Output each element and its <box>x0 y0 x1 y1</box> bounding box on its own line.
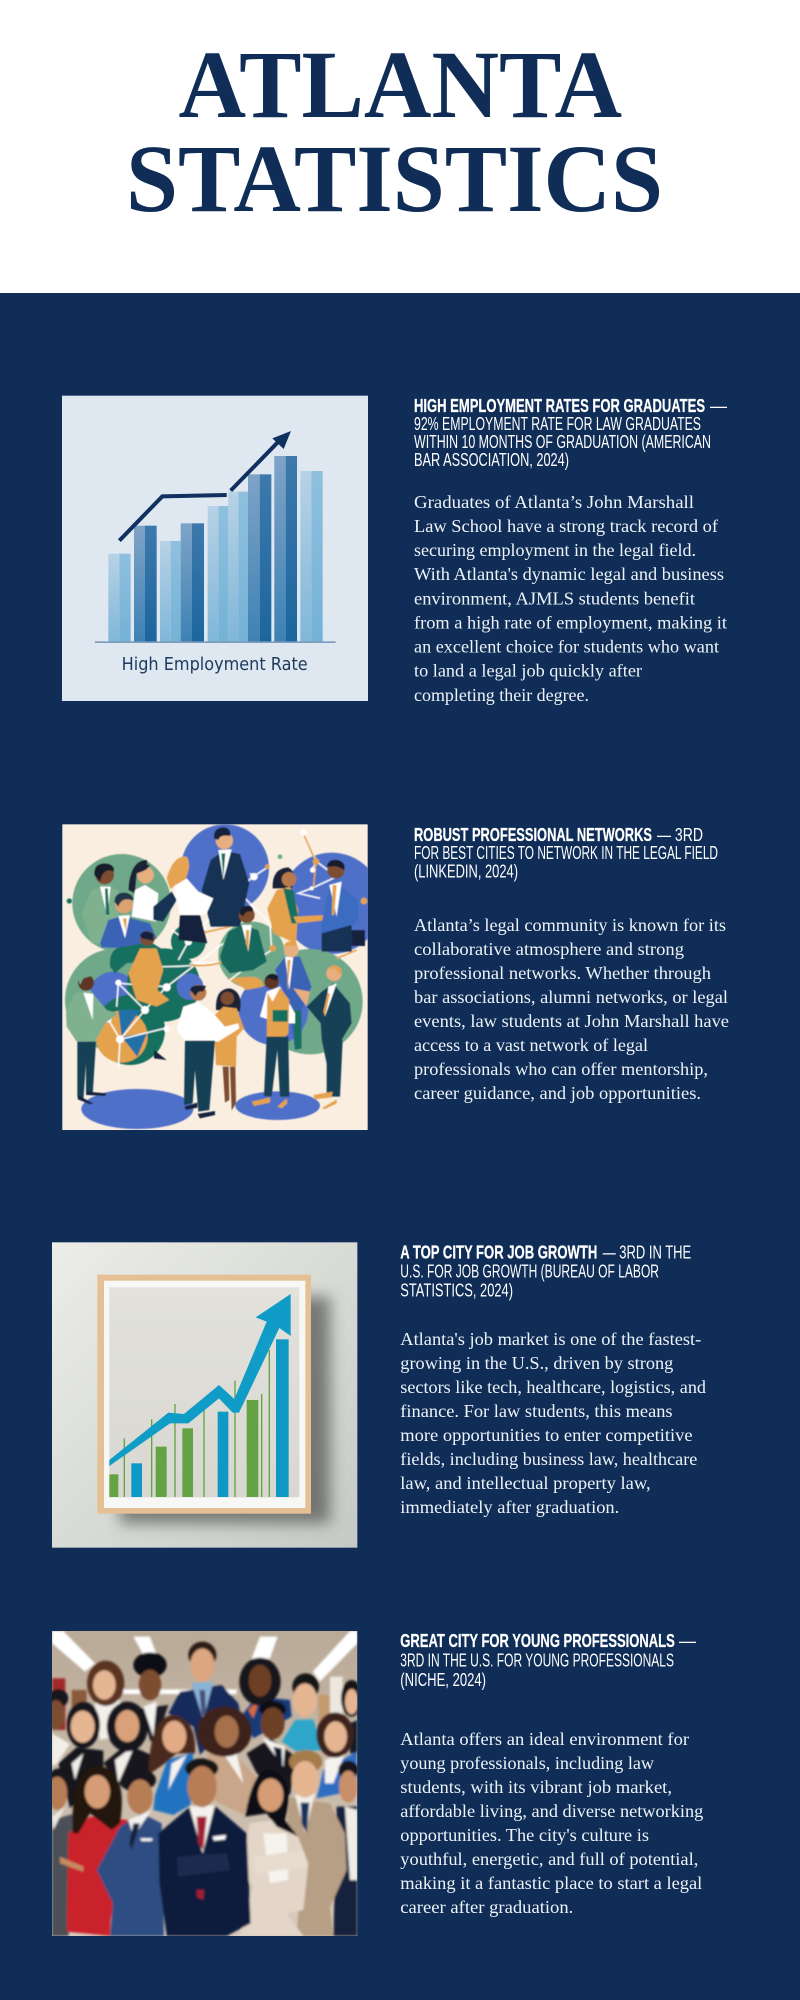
heading: ROBUST PROFESSIONAL NETWORKS <box>414 824 652 845</box>
body text <box>400 1329 706 1517</box>
heading: (LINKEDIN, 2024) <box>414 860 518 882</box>
illustration: high employment rate bar chart: High Employment Rate <box>122 654 308 675</box>
body text: affordable living, and diverse networking <box>400 1801 703 1821</box>
heading: — <box>679 1630 696 1651</box>
title: ATLANTA <box>178 31 622 138</box>
body text: collaborative atmosphere and strong <box>414 939 684 959</box>
front row <box>47 1750 358 1936</box>
figure: man, top center <box>202 827 249 927</box>
heading: STATISTICS, 2024) <box>400 1280 513 1300</box>
body text: opportunities. The city's culture is <box>400 1825 649 1845</box>
body text: career guidance, and job opportunities. <box>414 1083 701 1103</box>
body text: an excellent choice for students who want <box>414 636 719 656</box>
figure: vest man <box>252 974 295 1108</box>
title: STATISTICS <box>126 125 663 232</box>
body text: Graduates of Atlanta’s John Marshall <box>414 492 694 512</box>
body text <box>414 915 729 1103</box>
body text: bar associations, alumni networks, or legal <box>414 987 728 1007</box>
panel: robust professional networks <box>62 824 729 1130</box>
body text: finance. For law students, this means <box>400 1401 673 1421</box>
body text: career after graduation. <box>400 1897 573 1917</box>
illustration: professional network people <box>62 824 382 1130</box>
body text: Atlanta offers an ideal environment for <box>400 1729 689 1749</box>
heading <box>400 1242 691 1300</box>
figure: man, teal jacket center <box>220 906 267 973</box>
panel: high employment rates <box>62 395 727 705</box>
heading <box>414 824 718 882</box>
dots <box>105 829 315 1043</box>
heading <box>414 395 727 470</box>
header band <box>0 0 800 293</box>
panel: great city for young professionals <box>47 1630 703 1936</box>
heading: BAR ASSOCIATION, 2024) <box>414 449 569 470</box>
figure: woman in orange skirt <box>213 988 244 1111</box>
heading <box>400 1630 696 1690</box>
figure: man, navy jacket right <box>293 965 352 1109</box>
body text: more opportunities to enter competitive <box>400 1425 693 1445</box>
body text <box>414 492 727 705</box>
figure: seated woman orange coat <box>110 931 169 1060</box>
illustration: framed growth chart <box>52 1242 357 1548</box>
body text: professional networks. Whether through <box>414 963 711 983</box>
heading: U.S. FOR JOB GROWTH (BUREAU OF LABOR <box>400 1260 659 1282</box>
body text: professionals who can offer mentorship, <box>414 1059 708 1079</box>
body text: Atlanta's job market is one of the fastest- <box>400 1329 701 1349</box>
body text: securing employment in the legal field. <box>414 540 696 560</box>
body text: making it a fantastic place to start a legal <box>400 1873 702 1893</box>
heading: GREAT CITY FOR YOUNG PROFESSIONALS <box>400 1630 675 1651</box>
figure: man, green jacket <box>82 863 118 943</box>
figure: woman, orange coat <box>267 867 328 943</box>
heading: — 3RD IN THE <box>603 1242 691 1262</box>
body text: completing their degree. <box>414 685 589 705</box>
body text: Law School have a strong track record of <box>414 516 719 536</box>
figure: man, green jacket left <box>66 972 118 1104</box>
heading: — <box>710 395 727 416</box>
illustration: group of young professionals <box>47 1631 362 1936</box>
figure: woman, white shirt <box>128 860 177 922</box>
title <box>126 31 663 232</box>
figure: man, blue jacket with glasses <box>100 893 157 948</box>
body text: growing in the U.S., driven by strong <box>400 1353 673 1373</box>
body text: immediately after graduation. <box>400 1497 619 1517</box>
figure: blonde woman from behind <box>167 857 213 943</box>
body text: access to a vast network of legal <box>414 1035 648 1055</box>
body text: With Atlanta's dynamic legal and business <box>414 564 724 584</box>
back row <box>47 1642 362 1765</box>
body text: young professionals, including law <box>400 1753 655 1773</box>
body text: events, law students at John Marshall have <box>414 1011 729 1031</box>
heading: — 3RD <box>657 824 703 845</box>
body text: environment, AJMLS students benefit <box>414 588 695 608</box>
body text: from a high rate of employment, making it <box>414 612 727 632</box>
heading: (NICHE, 2024) <box>400 1669 486 1690</box>
heading: A TOP CITY FOR JOB GROWTH <box>400 1242 597 1262</box>
figure: blond man, blue jacket <box>275 941 312 1050</box>
panel: top city for job growth <box>52 1242 706 1548</box>
middle row <box>58 1701 357 1815</box>
illustration: high employment rate bar chart <box>62 396 368 701</box>
body text: youthful, energetic, and full of potential, <box>400 1849 698 1869</box>
body text: fields, including business law, healthcare <box>400 1449 697 1469</box>
body text <box>400 1729 703 1917</box>
body text: Atlanta’s legal community is known for its <box>414 915 726 935</box>
body text: students, with its vibrant job market, <box>400 1777 672 1797</box>
figure: man, white shirt from behind <box>177 985 239 1118</box>
body text: law, and intellectual property law, <box>400 1473 651 1493</box>
body text: to land a legal job quickly after <box>414 660 642 680</box>
figure: man, blue jacket right <box>322 860 365 952</box>
body text: sectors like tech, healthcare, logistics, and <box>400 1377 706 1397</box>
